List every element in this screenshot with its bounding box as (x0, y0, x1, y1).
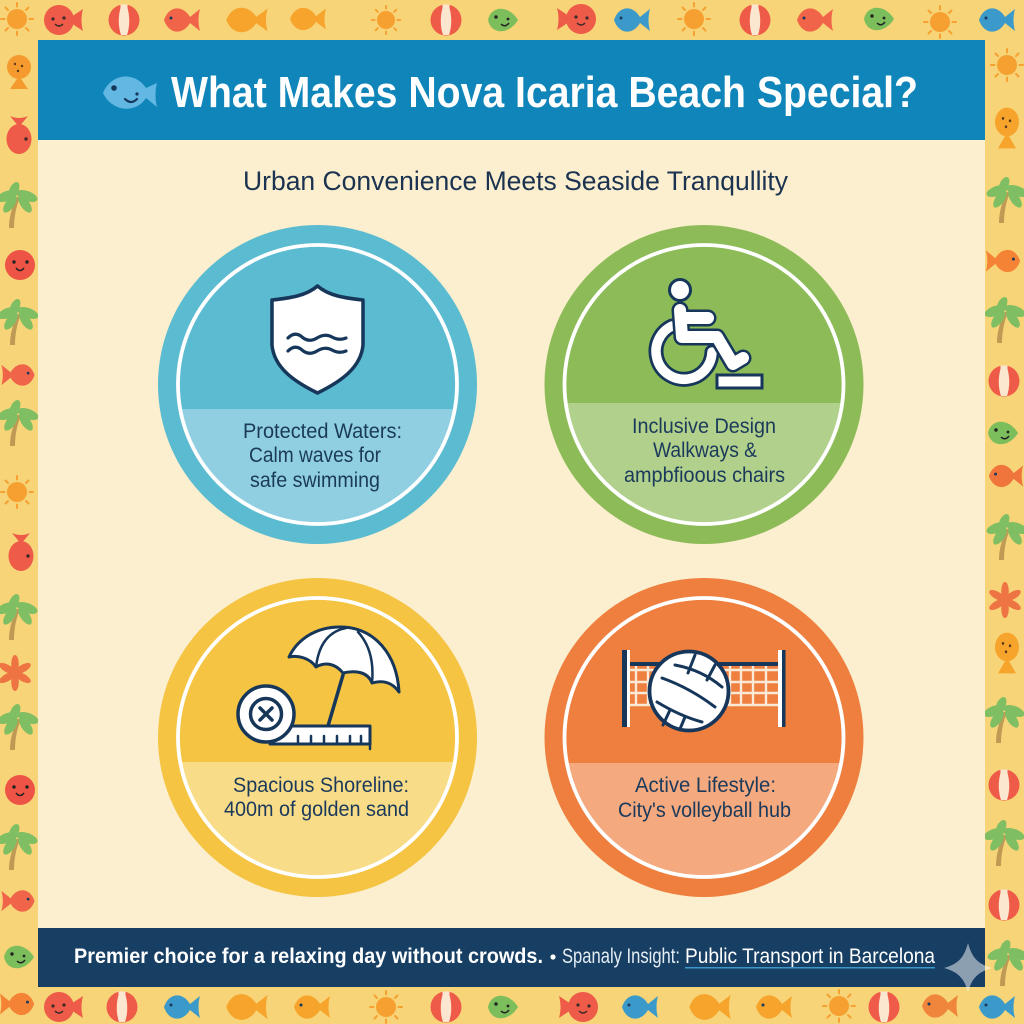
icon: wheelchair user (656, 280, 762, 388)
panel: spacious shoreline (158, 578, 477, 897)
text: protected waters (243, 420, 402, 492)
bullet separator (550, 954, 556, 960)
text: inclusive design: Walkways & (653, 439, 757, 462)
text: protected waters: Protected Waters: (243, 420, 402, 443)
title: What Makes Nova Icaria Beach Special? (171, 68, 918, 117)
icon: umbrella and measuring tape (238, 627, 399, 749)
text: active lifestyle: Active Lifestyle: (635, 774, 776, 797)
text: inclusive design: ampbfioous chairs (624, 464, 785, 487)
text: spacious shoreline (224, 774, 409, 821)
panel: active lifestyle (544, 578, 864, 897)
text: protected waters: safe swimming (250, 469, 380, 492)
subtitle: Urban Convenience Meets Seaside Tranqullity (243, 166, 788, 196)
icon: bottom border row (0, 990, 1015, 1023)
text: spacious shoreline: Spacious Shoreline: (233, 774, 409, 797)
icon: sparkle watermark (944, 943, 992, 992)
footer message: Premier choice for a relaxing day without crowds. (74, 945, 543, 968)
icon: volleyball and net (622, 650, 786, 730)
icon: top border row (1, 3, 1015, 38)
text: inclusive design (624, 415, 785, 487)
panel: inclusive design (544, 225, 864, 544)
text: active lifestyle: City's volleyball hub (618, 799, 791, 822)
header banner (38, 40, 985, 140)
text: inclusive design: Inclusive Design (632, 415, 776, 438)
icon: right border column (982, 49, 1024, 986)
panel: protected waters (158, 225, 477, 544)
footer link: Public Transport in Barcelona (685, 945, 935, 968)
text: spacious shoreline: 400m of golden sand (224, 798, 409, 821)
text: protected waters: Calm waves for (249, 444, 381, 467)
icon: left border column (0, 55, 40, 968)
main cream panel (38, 140, 985, 928)
footer insight label: Spanaly Insight: (562, 945, 680, 968)
footer banner (38, 928, 985, 987)
text: active lifestyle (618, 774, 791, 822)
icon: smiling blue fish (103, 77, 157, 109)
icon: shield with waves (272, 286, 363, 393)
